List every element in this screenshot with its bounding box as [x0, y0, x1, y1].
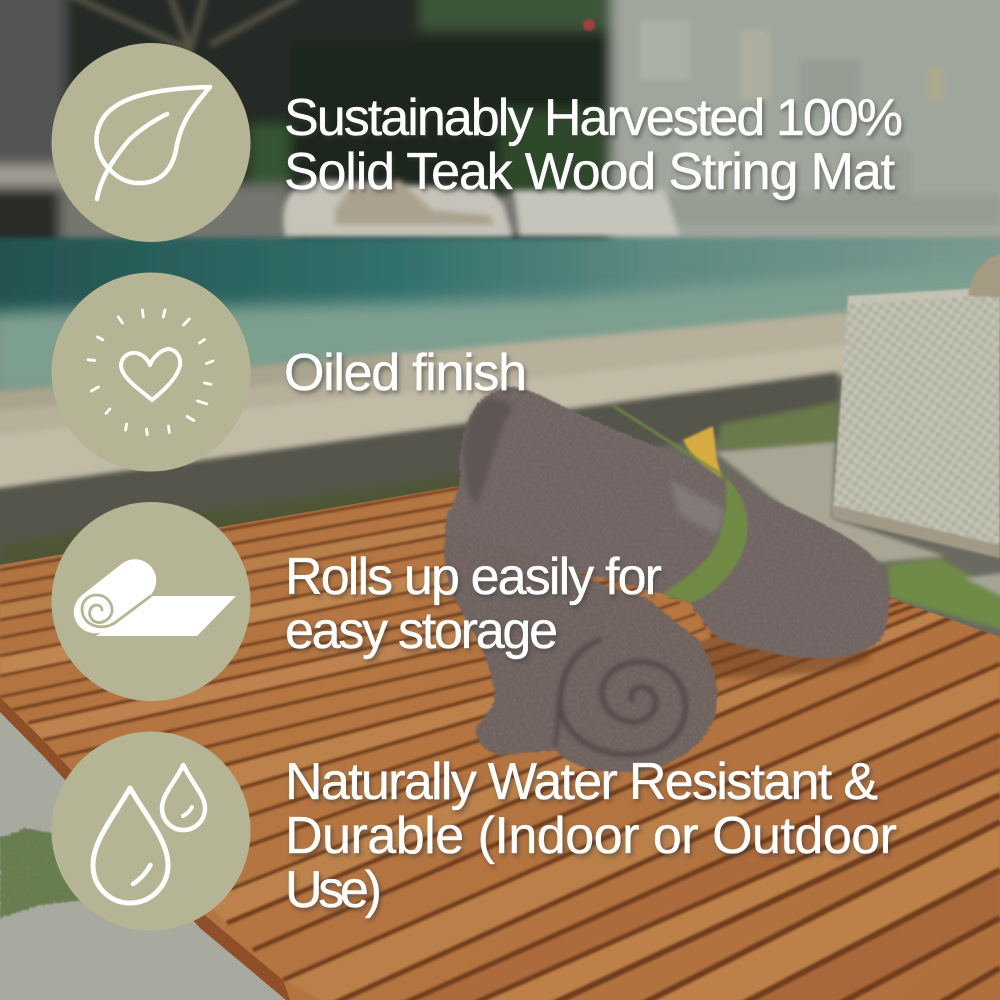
- background: tree branches: [70, 0, 300, 50]
- teak deck with slats: [0, 486, 1000, 1000]
- towel: shadow on deck: [590, 633, 870, 677]
- background: pool coping: [0, 312, 850, 492]
- icon: heart with rays: [88, 310, 213, 435]
- towel: grey leaf fold: [670, 480, 725, 535]
- deck: slats visible between towels: [645, 596, 712, 642]
- towel: small rolled towel: [444, 530, 717, 772]
- background: grass patch: [0, 828, 82, 918]
- panel: feature 2 badge: [52, 272, 250, 472]
- heading: feature 4 text: [285, 753, 897, 919]
- heading: feature 1 text: Solid Teak Wood String Mat: [284, 143, 896, 201]
- icon: red flower in foliage: [583, 19, 595, 31]
- panel: feature 3 badge: [52, 502, 250, 701]
- background: woven white cube: [832, 252, 1000, 558]
- background: slat end thickness: [0, 697, 300, 1000]
- towel: spiral folds: [555, 640, 686, 755]
- icon: rolled mat: [82, 580, 236, 636]
- background: concrete paving right: [715, 442, 1000, 632]
- background: dark retaining wall: [0, 372, 838, 575]
- icon: leaf: [97, 87, 210, 199]
- background: stone wall blocks: [620, 20, 1000, 225]
- heading: feature 4 text: Durable (Indoor or Outdoor: [285, 807, 897, 865]
- heading: feature 4 text: Naturally Water Resistant &: [285, 753, 878, 811]
- deck: slat tone variation: [0, 523, 1000, 1000]
- background: concrete ground lower left: [0, 690, 295, 1000]
- icon: water drops: [93, 765, 205, 903]
- panel: feature 4 badge: [52, 732, 250, 930]
- towels with green leaf band: [444, 387, 889, 772]
- background: white lounge furniture: [283, 180, 680, 238]
- heading: feature 4 text: Use): [285, 861, 382, 919]
- heading: feature 3 text: Rolls up easily for: [285, 548, 662, 606]
- heading: feature 1 text: Sustainably Harvested 100%: [284, 89, 903, 147]
- heading: feature 3 text: easy storage: [285, 602, 558, 660]
- background: garden and walls: [0, 0, 1000, 250]
- heading: feature 3 text: [285, 548, 662, 660]
- panel: feature 1 badge: [52, 43, 250, 242]
- heading: feature 2 text: Oiled finish: [284, 344, 527, 402]
- heading: feature 1 text: [284, 89, 903, 201]
- towel: large rolled towel: [445, 387, 889, 658]
- towel: folded end shading: [463, 398, 512, 505]
- towel: green band: [612, 405, 748, 603]
- deck: slat gaps: [0, 486, 1000, 1000]
- background: swimming pool: [0, 238, 1000, 400]
- icon: yellow flower: [683, 426, 722, 478]
